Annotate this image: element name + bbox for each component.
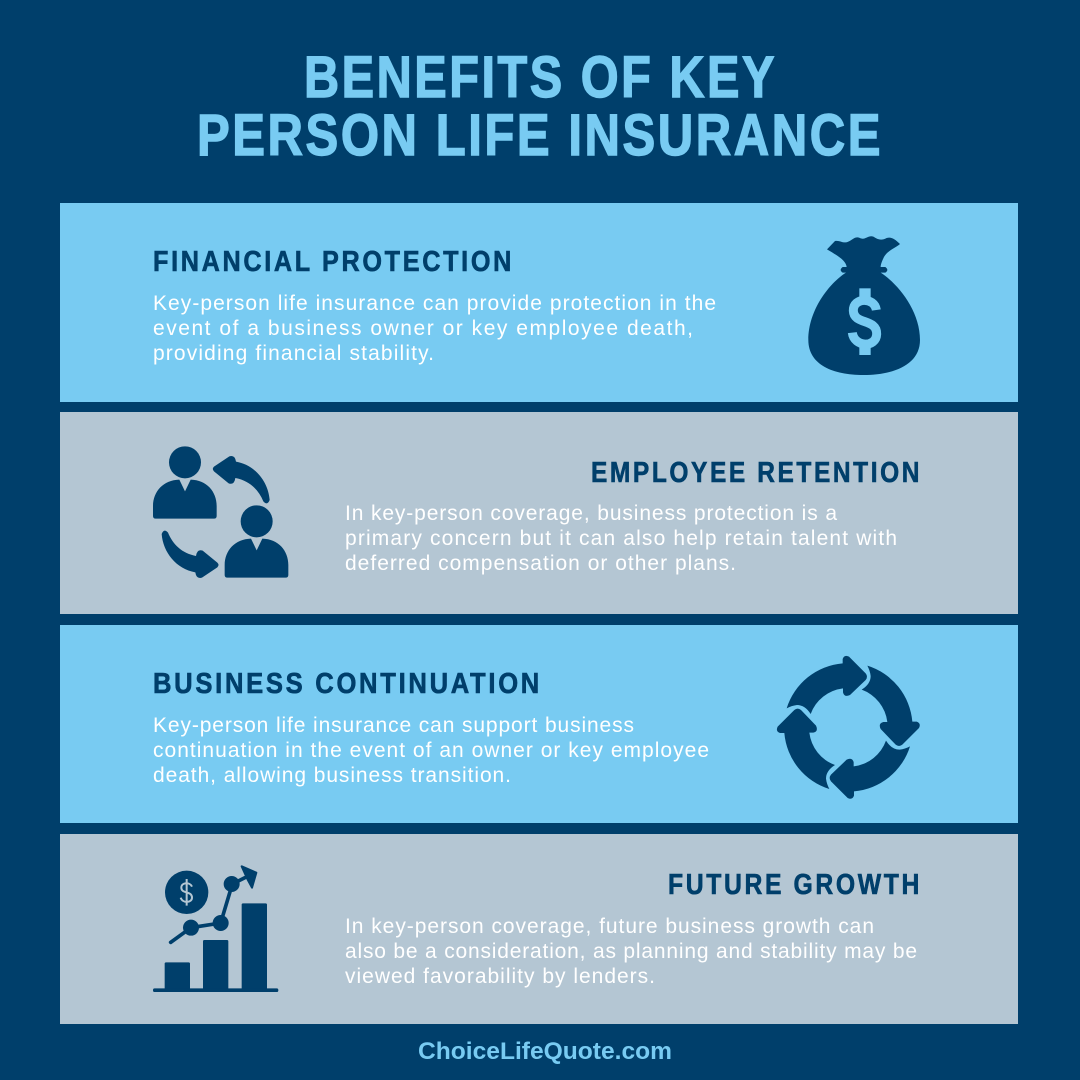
panel: future growth xyxy=(60,834,1018,1024)
text block: financial protection: Key-person life insurance can provide protection in the xyxy=(153,292,716,315)
panel: financial protection xyxy=(60,203,1018,402)
icon: money bag xyxy=(808,236,920,375)
icon: circular arrows xyxy=(777,656,920,799)
footer: website: ChoiceLifeQuote.com xyxy=(418,1038,672,1065)
title: PERSON LIFE INSURANCE xyxy=(197,103,883,168)
panel: employee retention xyxy=(60,412,1018,614)
text block: employee retention: primary concern but it can also help retain talent with xyxy=(345,527,897,550)
title: BENEFITS OF KEY xyxy=(304,45,777,110)
icon: growth chart xyxy=(153,866,278,992)
heading: financial protection: FINANCIAL PROTECTION xyxy=(153,246,514,278)
text block: future growth: also be a consideration, as planning and stability may be xyxy=(345,940,917,963)
text block: financial protection xyxy=(153,292,716,365)
heading: employee retention: EMPLOYEE RETENTION xyxy=(591,457,922,489)
heading: business continuation: BUSINESS CONTINUATION xyxy=(153,668,542,700)
icon: people exchange xyxy=(153,446,288,578)
text block: financial protection: providing financial stability. xyxy=(153,342,434,365)
text block: business continuation xyxy=(153,714,709,787)
panel: business continuation xyxy=(60,625,1018,823)
text block: business continuation: death, allowing business transition. xyxy=(153,764,511,787)
title xyxy=(197,45,883,168)
text block: employee retention: deferred compensation or other plans. xyxy=(345,552,736,575)
text block: financial protection: event of a business owner or key employee death, xyxy=(153,317,693,340)
text block: employee retention xyxy=(345,502,897,575)
text block: future growth xyxy=(345,915,917,988)
text block: business continuation: Key-person life insurance can support business xyxy=(153,714,634,737)
heading: future growth: FUTURE GROWTH xyxy=(668,869,922,901)
text block: business continuation: continuation in the event of an owner or key employee xyxy=(153,739,709,762)
text block: employee retention: In key-person coverage, business protection is a xyxy=(345,502,837,525)
text block: future growth: viewed favorability by lenders. xyxy=(345,965,655,988)
text block: future growth: In key-person coverage, future business growth can xyxy=(345,915,874,938)
